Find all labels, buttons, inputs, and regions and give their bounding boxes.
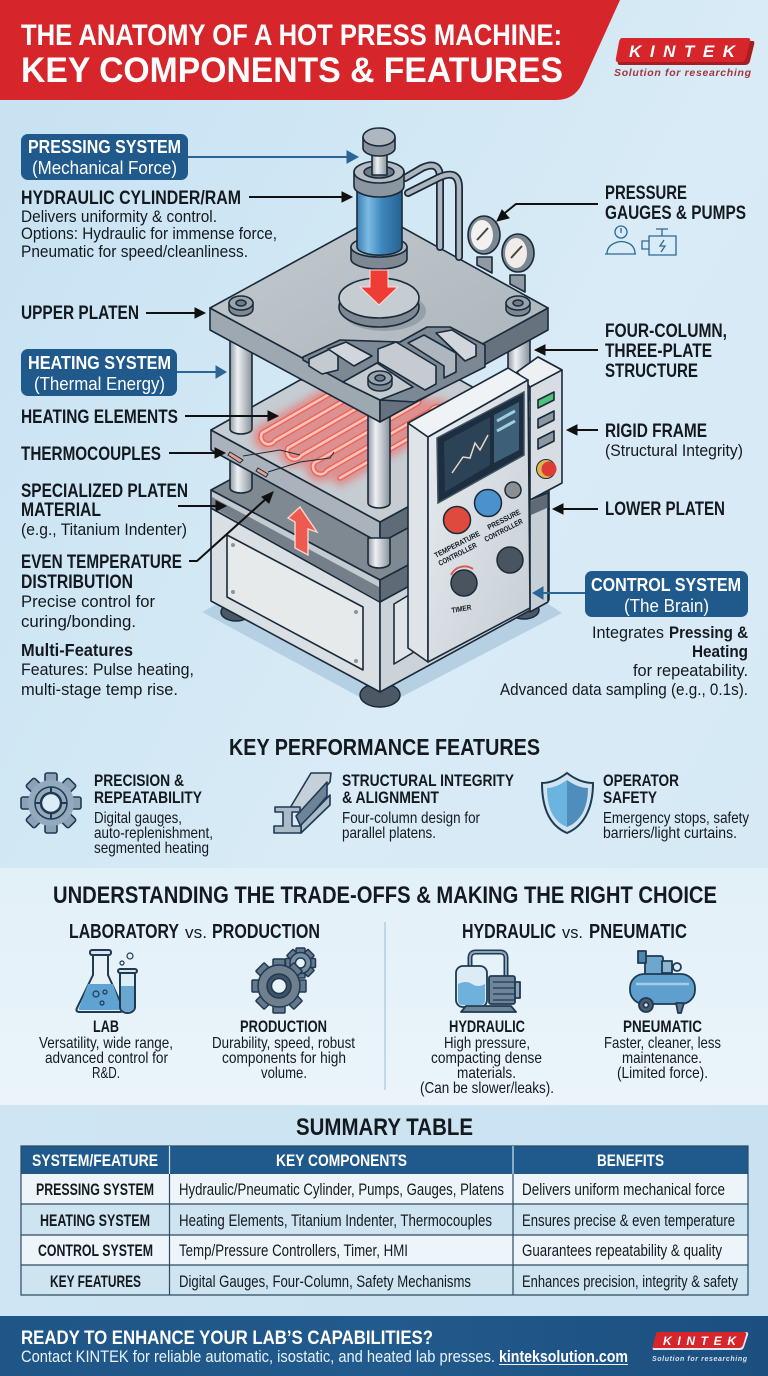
- label: multi-features: multi-stage temp rise.: [21, 680, 178, 699]
- arrow: thermocouples: [169, 448, 225, 458]
- text: pneumatic: (Limited force).: [617, 1065, 708, 1082]
- upper platen: [210, 215, 548, 422]
- front column upper: [368, 415, 390, 508]
- subheading: laboratory vs production: PRODUCTION: [212, 921, 320, 943]
- panel: summary: [0, 1105, 768, 1316]
- row: pressing system: [21, 1174, 748, 1204]
- heating elements: [261, 373, 445, 478]
- subheading: hydraulic vs pneumatic: PNEUMATIC: [589, 921, 687, 943]
- icon: precision gear: [21, 773, 81, 833]
- table header: KEY COMPONENTS: [276, 1152, 407, 1170]
- badge: control system: (The Brain): [624, 596, 709, 616]
- row: control system: [21, 1235, 748, 1265]
- base cabinet: [211, 508, 380, 692]
- badge: pressing system: [21, 134, 188, 180]
- hydraulic pipes: [405, 166, 459, 257]
- text: hydraulic: High pressure,: [444, 1035, 530, 1052]
- text: precision and repeatability: Digital gauges,: [94, 810, 182, 827]
- arrow: cylinder: [249, 192, 352, 202]
- floor shadow: [202, 560, 562, 708]
- label: even temperature distribution: DISTRIBUTION: [21, 572, 133, 593]
- text: precision and repeatability: PRECISION &: [94, 771, 184, 790]
- label: pressure gauges and pumps: [605, 183, 746, 224]
- label: upper platen: UPPER PLATEN: [21, 303, 139, 324]
- badge: pressing system: (Mechanical Force): [32, 158, 177, 178]
- touch screen: [437, 392, 524, 503]
- subheading: laboratory vs production: vs.: [185, 923, 207, 942]
- label: specialized platen material: SPECIALIZED PLATEN: [21, 481, 188, 502]
- text: production: components for high: [222, 1050, 346, 1067]
- text: structural integrity: Four-column design for: [342, 810, 481, 827]
- gauges: [468, 216, 534, 292]
- text: precision and repeatability: auto-replenishment,: [94, 825, 213, 842]
- footer call to action: READY TO ENHANCE YOUR LAB’S CAPABILITIES?: [21, 1327, 433, 1349]
- title: THE ANATOMY OF A HOT PRESS MACHINE:: [21, 19, 562, 52]
- label: hydraulic cylinder: Options: Hydraulic for immense force,: [21, 224, 277, 243]
- icons: gauge and pump: [605, 226, 676, 255]
- table header: [21, 1146, 748, 1174]
- pressure disc: [339, 278, 426, 331]
- text: production: Durability, speed, robust: [212, 1035, 355, 1052]
- row: key features: Digital Gauges, Four-Column, Safety Mechanisms: [179, 1273, 471, 1291]
- text: structural integrity: parallel platens.: [342, 825, 436, 842]
- footer band: [0, 1316, 768, 1376]
- panel labels: TIMER: [451, 603, 473, 615]
- badge: control system: CONTROL SYSTEM: [591, 575, 741, 595]
- header banner: [0, 0, 620, 100]
- badge: heating system: (Thermal Energy): [34, 374, 165, 394]
- text: lab: LAB: [93, 1017, 119, 1036]
- text: hydraulic: [420, 1017, 554, 1097]
- label: lower platen: LOWER PLATEN: [605, 499, 725, 520]
- row: heating system: [21, 1204, 748, 1235]
- label: even temperature distribution: Precise control for: [21, 592, 155, 611]
- arrow: even temperature: [189, 492, 273, 561]
- label: four-column structure: THREE-PLATE: [605, 341, 712, 362]
- text: control system description: [500, 623, 748, 699]
- bolts: [229, 296, 530, 391]
- label: rigid frame: [605, 421, 743, 460]
- text: precision and repeatability: segmented heating: [94, 840, 209, 857]
- subheading: hydraulic vs pneumatic: [462, 921, 687, 943]
- badge: pressing system: PRESSING SYSTEM: [28, 137, 181, 157]
- subheading: hydraulic vs pneumatic: vs.: [562, 923, 583, 942]
- footer call to action: [21, 1327, 628, 1366]
- text: operator safety: SAFETY: [603, 788, 658, 807]
- label: hydraulic cylinder: Pneumatic for speed/cleanliness.: [21, 242, 248, 261]
- text: pneumatic: [604, 1017, 721, 1082]
- text: pneumatic: PNEUMATIC: [623, 1017, 702, 1036]
- row: key features: KEY FEATURES: [50, 1273, 141, 1291]
- arrow: four-column: [535, 345, 598, 355]
- label: hydraulic cylinder: Delivers uniformity & control.: [21, 207, 217, 226]
- title: [21, 19, 563, 90]
- hydraulic cylinder: [351, 128, 407, 269]
- row: pressing system: Delivers uniform mechanical force: [522, 1181, 725, 1199]
- label: even temperature distribution: EVEN TEMPERATURE: [21, 552, 182, 573]
- label: specialized platen material: [21, 481, 188, 539]
- lower platen: [211, 442, 549, 602]
- row: heating system: HEATING SYSTEM: [40, 1212, 150, 1230]
- logo: KINTEK: [614, 38, 754, 79]
- row: control system: Temp/Pressure Controllers, Timer, HMI: [179, 1242, 408, 1260]
- text: operator safety: OPERATOR: [603, 771, 679, 790]
- arrow: pressure gauges: [497, 204, 598, 221]
- text: lab: R&D.: [92, 1065, 120, 1082]
- icon: pneumatic compressor: [630, 951, 695, 1013]
- text: control system description: Integrates: [592, 623, 664, 642]
- row: pressing system: Hydraulic/Pneumatic Cylinder, Pumps, Gauges, Platens: [179, 1181, 504, 1199]
- label: specialized platen material: MATERIAL: [21, 500, 101, 521]
- label: pressure gauges and pumps: PRESSURE: [605, 183, 687, 204]
- panel labels: CONTROLLER: [483, 516, 525, 544]
- icon: I-beam: [274, 773, 331, 833]
- panel knobs: [444, 482, 523, 596]
- row: heating system: Heating Elements, Titanium Indenter, Thermocouples: [179, 1212, 492, 1230]
- summary table: [21, 1146, 748, 1295]
- thermocouples: [228, 450, 334, 477]
- footer logo: [652, 1332, 748, 1363]
- panel: trade-offs: [0, 868, 768, 1105]
- text: hydraulic: (Can be slower/leaks).: [420, 1080, 554, 1097]
- heading: key performance features: KEY PERFORMANCE FEATURES: [229, 734, 540, 760]
- label: even temperature distribution: curing/bonding.: [21, 612, 136, 631]
- icon: flask: [76, 950, 137, 1013]
- panel labels: [433, 507, 525, 615]
- text: production: PRODUCTION: [240, 1017, 327, 1036]
- table header: SYSTEM/FEATURE: [32, 1152, 158, 1170]
- text: structural integrity: & ALIGNMENT: [342, 788, 440, 807]
- label: four-column structure: [605, 321, 727, 382]
- row: key features: [21, 1265, 748, 1295]
- subheading: laboratory vs production: [69, 921, 320, 943]
- text: control system description: Pressing &: [669, 623, 748, 642]
- machine illustration: [202, 128, 562, 708]
- text: precision and repeatability: REPEATABILITY: [94, 788, 203, 807]
- icon: production gears: [252, 948, 316, 1013]
- text: production: [212, 1017, 355, 1082]
- red up arrow: [288, 507, 317, 555]
- logo: KINTEK: Solution for researching: [614, 67, 752, 79]
- feet: [221, 601, 539, 707]
- text: hydraulic: materials.: [457, 1065, 516, 1082]
- text: production: volume.: [261, 1065, 307, 1082]
- label: hydraulic cylinder: HYDRAULIC CYLINDER/RAM: [21, 188, 241, 209]
- footer logo: KINTEK: [663, 1334, 737, 1348]
- row: control system: Guarantees repeatability & quality: [522, 1242, 723, 1260]
- label: multi-features: Multi-Features: [21, 640, 133, 660]
- left column lower section: [230, 445, 252, 493]
- base cover plate: [227, 535, 363, 670]
- panel labels: CONTROLLER: [437, 540, 479, 568]
- logo: KINTEK: KINTEK: [629, 42, 737, 61]
- footer logo: Solution for researching: [652, 1356, 748, 1363]
- text: operator safety: [603, 771, 749, 842]
- text: control system description: for repeatability.: [633, 661, 748, 680]
- row: pressing system: PRESSING SYSTEM: [36, 1181, 154, 1199]
- footer call to action: kinteksolution.com: [499, 1347, 628, 1366]
- text: structural integrity: STRUCTURAL INTEGRITY: [342, 771, 515, 790]
- subheading: hydraulic vs pneumatic: HYDRAULIC: [462, 921, 556, 943]
- arrow: heating elements: [185, 411, 278, 421]
- panel labels: PRESSURE: [486, 507, 522, 532]
- label: even temperature distribution: [21, 552, 182, 631]
- arrow: heating system: [177, 366, 226, 378]
- text: hydraulic: compacting dense: [431, 1050, 542, 1067]
- subheading: laboratory vs production: LABORATORY: [69, 921, 180, 943]
- red down arrow: [360, 270, 398, 305]
- label: rigid frame: RIGID FRAME: [605, 421, 707, 442]
- badge: control system: [585, 571, 748, 617]
- heading: summary table: SUMMARY TABLE: [296, 1114, 473, 1141]
- table header: BENEFITS: [597, 1152, 664, 1170]
- text: operator safety: barriers/light curtains.: [603, 825, 737, 842]
- arrow: pressing system: [188, 151, 358, 163]
- middle heating platen: [211, 380, 549, 543]
- label: heating elements: HEATING ELEMENTS: [21, 407, 178, 428]
- label: multi-features: Features: Pulse heating,: [21, 660, 194, 679]
- footer call to action: Contact KINTEK for reliable automatic, isostatic, and heated lab presses.: [21, 1347, 495, 1366]
- icon: hydraulic pump: [456, 952, 520, 1012]
- label: thermocouples: THERMOCOUPLES: [21, 444, 161, 465]
- text: lab: Versatility, wide range,: [39, 1035, 173, 1052]
- arrow: upper platen: [146, 308, 205, 318]
- label: specialized platen material: (e.g., Titanium Indenter): [21, 520, 187, 539]
- label: rigid frame: (Structural Integrity): [605, 441, 743, 460]
- label: four-column structure: STRUCTURE: [605, 361, 698, 382]
- back left column upper: [230, 330, 252, 434]
- text: structural integrity: [342, 771, 515, 842]
- text: precision and repeatability: [94, 771, 213, 857]
- text: pneumatic: Faster, cleaner, less: [604, 1035, 721, 1052]
- row: control system: CONTROL SYSTEM: [38, 1242, 153, 1260]
- title: KEY COMPONENTS & FEATURES: [21, 51, 563, 90]
- label: hydraulic cylinder: [21, 188, 277, 261]
- label: four-column structure: FOUR-COLUMN,: [605, 321, 727, 342]
- platen rail notch: [303, 327, 485, 402]
- text: lab: [39, 1017, 173, 1082]
- arrow: control system: [533, 587, 585, 599]
- icon: safety shield: [542, 773, 593, 833]
- text: pneumatic: maintenance.: [622, 1050, 702, 1067]
- arrow: rigid frame: [567, 425, 598, 435]
- back right column: [508, 340, 530, 400]
- front lower column: [368, 538, 390, 568]
- text: control system description: Heating: [692, 642, 748, 661]
- badge: heating system: HEATING SYSTEM: [28, 353, 171, 373]
- text: hydraulic: HYDRAULIC: [449, 1017, 525, 1036]
- control panel: [408, 368, 530, 662]
- badge: heating system: [21, 349, 177, 396]
- panel labels: TEMPERATURE: [433, 529, 481, 560]
- control box side: [517, 357, 562, 612]
- arrow: lower platen: [553, 504, 598, 514]
- text: lab: advanced control for: [45, 1050, 169, 1067]
- arrow: platen material: [178, 501, 226, 511]
- label: multi-features: [21, 640, 194, 699]
